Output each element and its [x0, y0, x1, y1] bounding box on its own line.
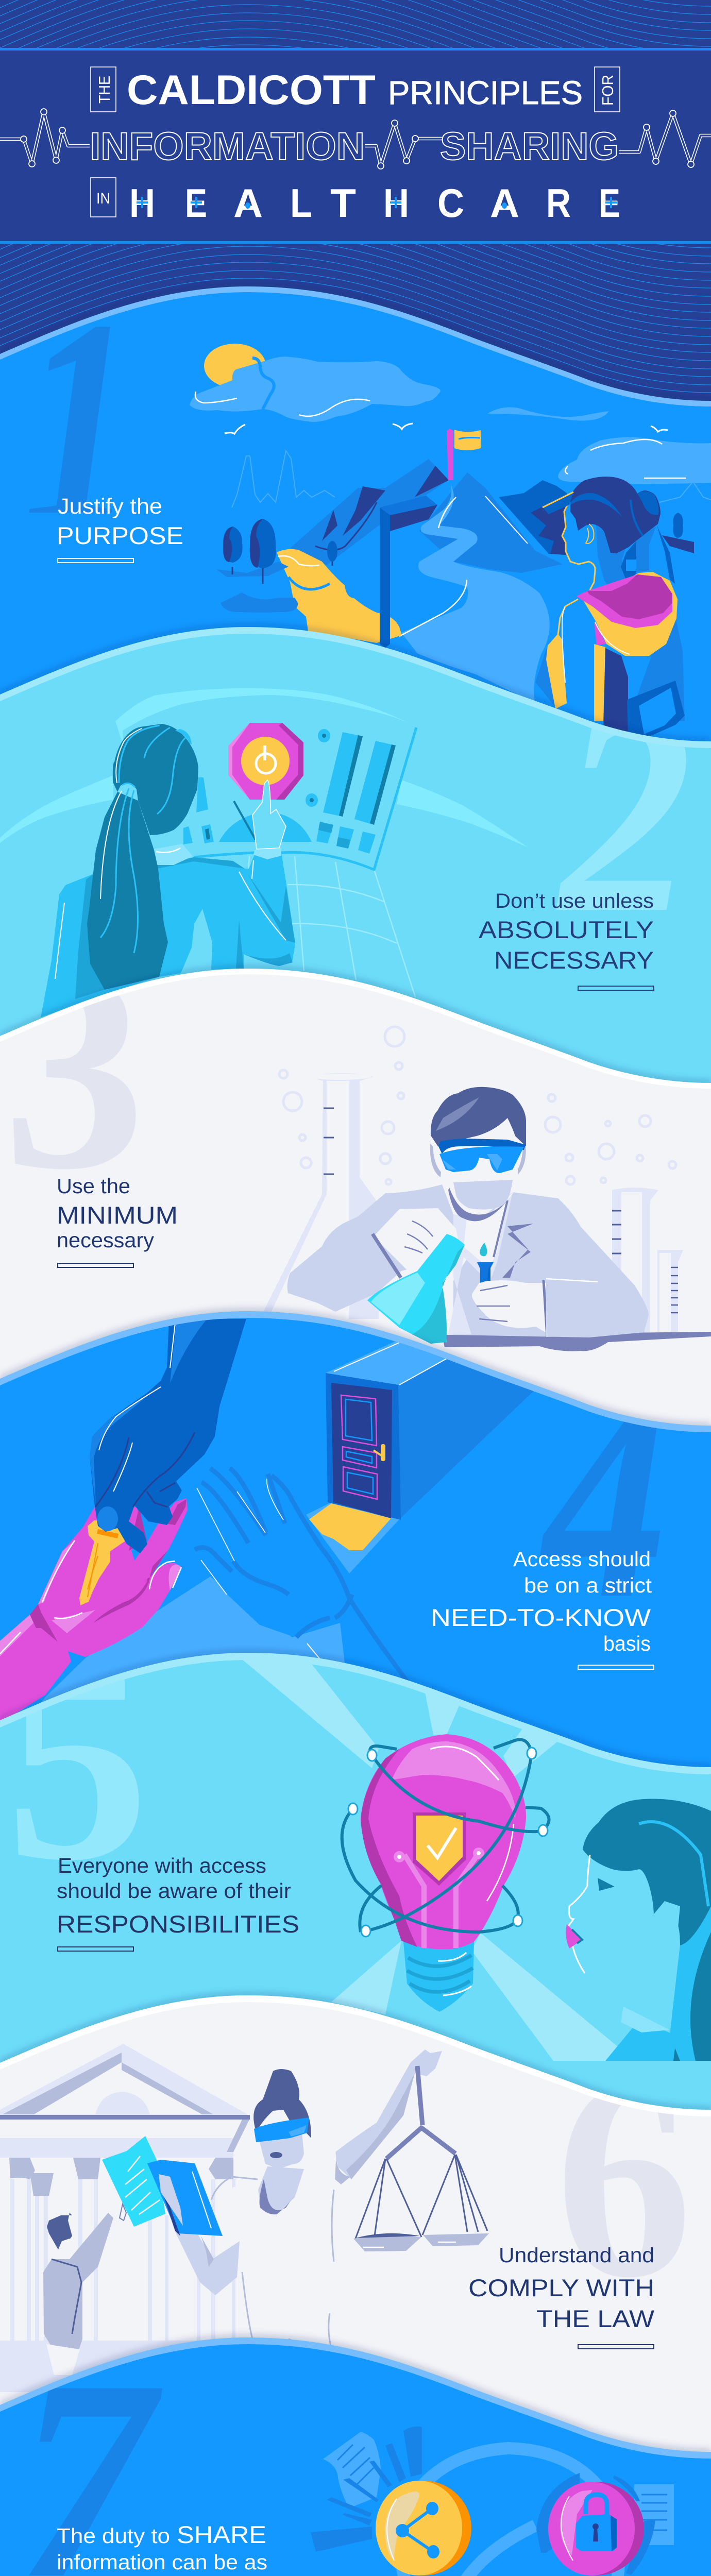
raised hand: [374, 1208, 459, 1273]
face: [259, 2128, 304, 2169]
title: Healthcare: A: [490, 180, 519, 226]
title: the: THE: [95, 76, 113, 104]
sun: [204, 344, 266, 388]
text 3: MINIMUM: [57, 1201, 178, 1229]
birds: [225, 423, 668, 434]
title: Healthcare: H: [383, 180, 409, 226]
back ridge: [290, 459, 449, 565]
title banner: [0, 48, 711, 244]
strap left yellow: [546, 634, 567, 709]
coat: [287, 1184, 649, 1337]
door panels: [341, 1395, 377, 1499]
hair bun: [637, 491, 658, 515]
text 4: Access should: [513, 1547, 651, 1571]
backpack pocket: [627, 681, 685, 739]
main mountain: [419, 472, 563, 573]
text 7: [57, 2521, 295, 2576]
title: Healthcare: E: [185, 180, 207, 226]
light rays: [229, 1649, 635, 2061]
circuit lines: [404, 1853, 479, 1948]
text 7: information can be as: [57, 2550, 267, 2574]
capitals: [9, 2158, 233, 2196]
cloud left: [190, 357, 441, 422]
columns: [10, 2179, 235, 2343]
lady justice: [102, 2049, 489, 2391]
tall cylinder: [612, 1188, 658, 1334]
raised arm: [335, 2049, 442, 2179]
head: [435, 1118, 526, 1185]
text 6: THE LAW: [536, 2305, 655, 2332]
text 2: [479, 890, 654, 990]
light bulb: [361, 1734, 526, 2012]
number 5: 5: [5, 1601, 149, 1920]
title: Healthcare: E: [599, 180, 620, 226]
title: the: [91, 67, 116, 112]
small tree right: [662, 513, 694, 553]
dark giving hand: [90, 1319, 246, 1553]
text 5: RESPONSIBILITIES: [57, 1910, 299, 1938]
text 3: necessary: [57, 1228, 154, 1252]
atom orbits: [342, 1739, 549, 1932]
title: in: [91, 178, 116, 217]
title: Healthcare: R: [546, 180, 571, 226]
text 6: [468, 2243, 655, 2349]
key: [79, 1520, 127, 1605]
pink receiving hand: [0, 1498, 188, 1723]
text 3: [57, 1174, 178, 1267]
glass: [361, 1734, 526, 1949]
panel: principle 1 background: [0, 286, 711, 740]
infinity ring: [401, 2448, 619, 2576]
title: in: IN: [96, 190, 110, 207]
floor grid: [242, 856, 415, 997]
ponytail: [87, 792, 168, 990]
text 6: Understand and: [499, 2243, 654, 2267]
shield: [413, 1812, 466, 1886]
panel: principle 5 background: [0, 1653, 711, 2106]
neck shading: [596, 524, 627, 591]
goggles: [438, 1139, 526, 1154]
scientist: [287, 1087, 649, 1344]
text 6: COMPLY WITH: [468, 2274, 654, 2301]
papers: [323, 2432, 674, 2576]
blindfold: [254, 2117, 309, 2142]
lock coin: [548, 2482, 644, 2575]
courthouse: [0, 2044, 319, 2392]
panel: principle 3: [0, 912, 711, 1428]
flag: [447, 429, 481, 480]
text 2: ABSOLUTELY: [479, 916, 654, 943]
drop: [480, 1243, 487, 1256]
half dial: [219, 801, 312, 842]
woman in profile: [566, 1799, 711, 2061]
heartbeat line: [0, 109, 711, 169]
hair: [570, 477, 661, 553]
panel: principle 6 background: [0, 1995, 711, 2449]
hood yellow: [584, 572, 678, 656]
title: Caldicott: CALDICOTT: [127, 67, 376, 113]
side gauge: [183, 777, 214, 844]
title: Healthcare: A: [233, 180, 263, 226]
panel: principle 2 background: [0, 627, 711, 1080]
number 6: 6: [555, 2018, 692, 2337]
title: Healthcare: T: [330, 180, 356, 226]
blouse: [41, 853, 295, 1018]
woman with long hair: [41, 724, 295, 1018]
title: for: [595, 67, 620, 112]
road: [399, 479, 550, 703]
panel: principle 7: [0, 2321, 711, 2576]
control panel frame: [194, 727, 416, 870]
door light on floor: [309, 1503, 391, 1550]
hair head: [113, 724, 198, 835]
right cuff and hand: [472, 1280, 549, 1334]
text 4: be on a strict: [524, 1573, 652, 1597]
text 3: Use the: [57, 1174, 130, 1198]
floor: [0, 2341, 319, 2392]
title: Healthcare: C: [437, 180, 464, 226]
book: [102, 2136, 165, 2227]
panel: principle 3 background: [0, 969, 711, 1422]
bubbles: [279, 1027, 676, 1184]
cloud wisp: [487, 408, 609, 421]
nose: [471, 1159, 492, 1180]
hand and finger: [252, 780, 286, 849]
small boy: [43, 2204, 126, 2375]
scales: [356, 2066, 487, 2239]
hand visor: [543, 492, 573, 514]
text 5: should be aware of their: [57, 1879, 291, 1903]
power button: [228, 723, 303, 800]
gauge bars: [306, 729, 396, 854]
test tube: [477, 1262, 494, 1283]
yellow hillside: [277, 549, 402, 643]
dark mountain: [499, 480, 571, 554]
hood purple: [587, 574, 672, 619]
text 7: The duty to: [57, 2524, 170, 2548]
hood magenta: [577, 574, 672, 628]
text 4: [431, 1547, 654, 1669]
small cylinder: [657, 1250, 683, 1332]
title: Healthcare: H: [129, 180, 155, 226]
ghost open hand: [193, 1467, 417, 1695]
light beam on floor: [31, 1502, 399, 1716]
panel: principle 2: [0, 634, 711, 1087]
medical crosses in Healthcare: [137, 197, 617, 209]
text 4: NEED-TO-KNOW: [431, 1604, 651, 1631]
panel: principle 4: [0, 1318, 711, 1771]
large flask: [260, 1073, 379, 1319]
number 2: 2: [555, 654, 692, 973]
table: [442, 1332, 711, 1351]
burst rays: [311, 2427, 655, 2575]
signpost: [380, 496, 437, 648]
panel: principle 7 background: [0, 2337, 711, 2576]
panel arcs: [0, 688, 528, 848]
woman hiker: [535, 477, 685, 739]
face outline: [562, 500, 595, 590]
text 1: [57, 494, 183, 563]
text 5: [57, 1854, 299, 1951]
holding hand: [159, 2174, 183, 2226]
hair: [431, 1087, 526, 1146]
share coin: [376, 2481, 471, 2575]
neck and chest: [258, 2166, 304, 2214]
panel: principle 4 background: [0, 1311, 711, 1765]
door light shadow wall: [398, 1355, 537, 1519]
mask: [453, 1180, 513, 1210]
screw base: [403, 1942, 474, 2012]
number 3: 3: [3, 912, 145, 1229]
door box: [326, 1340, 453, 1520]
panel: principle 5: [0, 1601, 711, 2113]
panel: principle 1: [0, 260, 711, 745]
title: Sharing: SHARING: [440, 125, 619, 168]
low land shadow: [221, 592, 298, 613]
title: Healthcare: [129, 180, 620, 226]
text 5: Everyone with access: [58, 1854, 266, 1877]
text 4: basis: [603, 1632, 651, 1655]
number 4: 4: [539, 1338, 668, 1658]
text 7: SHARE: [177, 2521, 266, 2548]
cloud right: [558, 437, 711, 484]
trees: [216, 519, 337, 584]
dress: [216, 2182, 350, 2391]
text 2: NECESSARY: [494, 946, 654, 974]
panel: principle 6: [0, 2002, 711, 2455]
title: Principles: PRINCIPLES: [388, 74, 583, 111]
text 2: Don’t use unless: [495, 890, 654, 912]
hair: [253, 2069, 311, 2138]
torso: [535, 599, 685, 732]
conical flask: [367, 1234, 465, 1344]
title: Information: INFORMATION: [90, 125, 365, 168]
text 1: Justify the: [58, 494, 162, 519]
title: Healthcare: L: [290, 180, 312, 226]
title: for: FOR: [599, 75, 617, 106]
shirt: [448, 1192, 513, 1334]
book arm: [159, 2182, 240, 2295]
text 1: PURPOSE: [57, 522, 183, 549]
collar: [154, 844, 193, 865]
faint ecg line: [232, 451, 711, 507]
back strap: [594, 622, 606, 645]
face and neck: [562, 500, 678, 599]
number 1: 1: [23, 260, 135, 586]
